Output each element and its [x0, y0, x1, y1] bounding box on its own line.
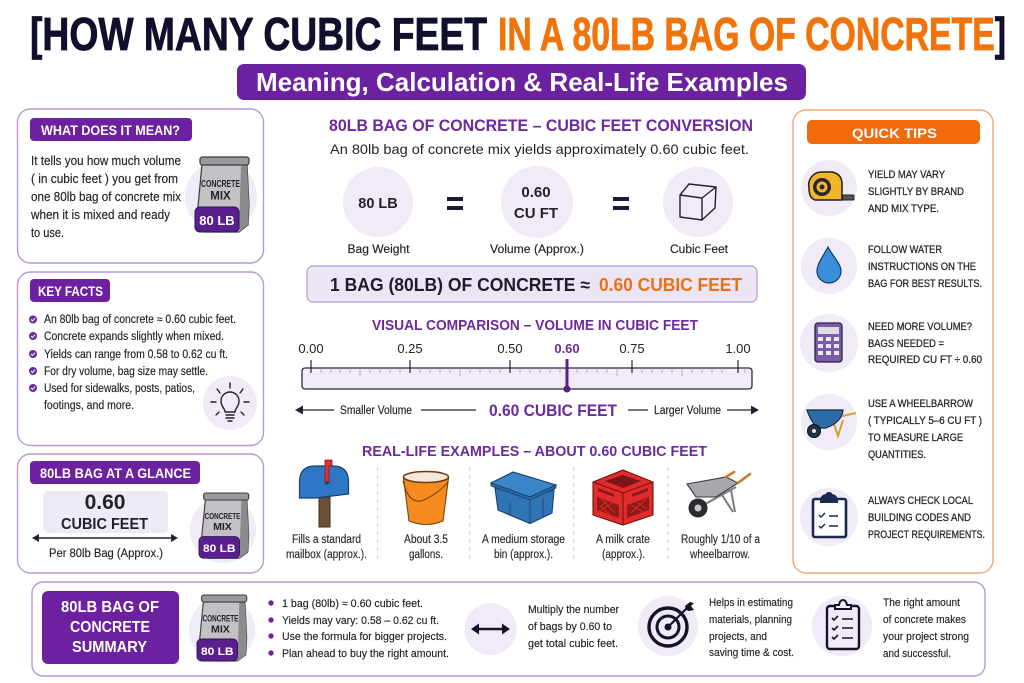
heading: what does it mean [30, 118, 192, 141]
icon: concrete bag [189, 595, 255, 663]
panel: key facts [18, 272, 264, 446]
item: bag weight [343, 167, 413, 256]
caption: storage bin: bin (approx.). [494, 549, 553, 561]
heading: key facts: KEY FACTS [38, 284, 103, 299]
arrow: smaller volume [295, 405, 476, 417]
list: key facts: Yields can range from 0.58 to 0.62 cu ft. [44, 349, 228, 361]
icon: concrete bag [190, 493, 256, 563]
section: visual comparison [295, 318, 759, 420]
text block: meaning: one 80lb bag of concrete mix [31, 190, 182, 204]
icon: wheelbarrow [687, 472, 750, 518]
heading: real-life examples: REAL-LIFE EXAMPLES – ABOUT 0.60 CUBIC FEET [362, 444, 707, 460]
item: bag weight: Bag Weight [348, 244, 410, 256]
caption: milk crate [596, 534, 650, 561]
item: bag weight: 80 LB [358, 196, 398, 212]
title [30, 8, 1006, 60]
icon: concrete bag: MIX [210, 190, 231, 202]
ruler scale: 0.25 [397, 341, 423, 356]
tip: water drop: FOLLOW WATER [868, 244, 942, 256]
caption: wheelbarrow [681, 534, 761, 561]
caption: milk crate: A milk crate [596, 534, 650, 546]
text: conversion summary: An 80lb bag of concrete mix yields approximately 0.60 cubic feet. [330, 141, 749, 157]
item: checklist [812, 596, 969, 660]
list: key facts: For dry volume, bag size may settle. [44, 366, 208, 378]
caption: mailbox: Fills a standard [292, 534, 361, 546]
icon: concrete bag: 80 LB [201, 645, 234, 658]
arrow: smaller volume: Smaller Volume [340, 405, 412, 417]
icon: bucket [403, 472, 448, 524]
title: [HOW MANY CUBIC FEET [30, 8, 487, 60]
tip: tape measure: AND MIX TYPE. [868, 203, 939, 215]
text block: meaning [30, 154, 182, 240]
tip: tape measure: YIELD MAY VARY [868, 169, 945, 181]
icon: concrete bag: MIX [211, 625, 230, 635]
item: checklist: The right amount [883, 597, 960, 609]
ruler scale: 0.75 [619, 341, 645, 356]
value: 0.60 cubic feet: CUBIC FEET [61, 516, 148, 533]
caption: per bag: Per 80lb Bag (Approx.) [49, 548, 163, 560]
heading: summary: 80LB BAG OF [61, 599, 159, 616]
heading: quick tips: QUICK TIPS [852, 125, 937, 141]
tip: clipboard: BUILDING CODES AND [868, 512, 971, 524]
item: volume [490, 166, 584, 256]
caption: bucket [404, 534, 448, 561]
tip: clipboard: ALWAYS CHECK LOCAL [868, 495, 973, 507]
heading: key facts [30, 279, 110, 302]
tip: wheelbarrow: ( TYPICALLY 5–6 CU FT ) [868, 415, 982, 427]
list: key facts: Used for sidewalks, posts, patios, [44, 383, 195, 395]
icon: concrete bag: MIX [213, 522, 232, 533]
item: cubic feet: Cubic Feet [670, 244, 729, 256]
tip: tape measure: SLIGHTLY BY BRAND [868, 186, 964, 198]
list: key facts: Concrete expands slightly when mixed. [44, 331, 224, 343]
heading: what does it mean: WHAT DOES IT MEAN? [41, 123, 180, 138]
list: key facts: An 80lb bag of concrete ≈ 0.60 cubic feet. [44, 314, 236, 326]
ruler scale: 0.50 [497, 341, 523, 356]
ruler scale [298, 341, 752, 392]
heading: at a glance: 80LB BAG AT A GLANCE [40, 466, 191, 481]
icon: concrete bag: CONCRETE [201, 179, 240, 190]
icon: concrete bag: 80 LB [203, 542, 236, 555]
equals sign [447, 197, 463, 210]
list: key facts [29, 314, 236, 412]
icon: light bulb [203, 376, 257, 430]
tip: calculator [800, 314, 982, 372]
heading: summary: CONCRETE [70, 619, 150, 636]
caption: wheelbarrow: Roughly 1/10 of a [681, 534, 761, 546]
icon: mailbox [300, 460, 348, 527]
item: target: saving time & cost. [709, 647, 794, 659]
caption: storage bin: A medium storage [482, 534, 565, 546]
arrow: larger volume [628, 405, 759, 417]
item: checklist: your project strong [883, 631, 969, 643]
tip: calculator: NEED MORE VOLUME? [868, 321, 972, 333]
item: multiply [464, 603, 619, 655]
panel: summary [32, 582, 985, 676]
tip: water drop [801, 238, 982, 294]
caption: bucket: About 3.5 [404, 534, 448, 546]
icon: concrete bag [185, 157, 257, 233]
ruler scale: 0.60 [554, 341, 580, 356]
list: summary points: Yields may vary: 0.58 – 0.62 cu ft. [282, 615, 439, 627]
icon: concrete bag: CONCRETE [203, 614, 238, 623]
item: volume: 0.60 [521, 184, 551, 201]
tip: calculator: REQUIRED CU FT ÷ 0.60 [868, 354, 982, 366]
caption: bucket: gallons. [409, 549, 443, 561]
arrow: double-headed [32, 534, 178, 542]
item: multiply: of bags by 0.60 to [528, 621, 612, 633]
ruler scale: 1.00 [725, 341, 751, 356]
heading: visual comparison: VISUAL COMPARISON – VOLUME IN CUBIC FEET [372, 318, 698, 334]
tip: wheelbarrow: USE A WHEELBARROW [868, 398, 974, 410]
list: summary points: Use the formula for bigger projects. [282, 631, 447, 643]
equals sign [613, 197, 629, 210]
tip: clipboard [800, 488, 985, 546]
text block: meaning: It tells you how much volume [31, 154, 181, 168]
callout: 1 bag equals: 1 BAG (80LB) OF CONCRETE ≈ [330, 275, 590, 295]
panel: 80lb bag at a glance [18, 454, 264, 573]
caption: mailbox: mailbox (approx.). [286, 549, 367, 561]
item: target: materials, planning [709, 614, 792, 626]
section: conversion [307, 117, 757, 302]
tip: wheelbarrow: TO MEASURE LARGE [868, 432, 963, 444]
section: real-life examples [286, 444, 761, 561]
tip: wheelbarrow [801, 394, 982, 461]
subtitle banner: Meaning, Calculation & Real-Life Examples [256, 67, 788, 97]
panel: what does it mean [18, 109, 264, 263]
ruler scale: 0.00 [298, 341, 324, 356]
caption: mailbox [286, 534, 367, 561]
tip: water drop: BAG FOR BEST RESULTS. [868, 278, 982, 290]
tip: water drop: INSTRUCTIONS ON THE [868, 261, 976, 273]
item: cubic feet [663, 167, 733, 256]
panel: quick tips [793, 110, 993, 573]
text block: meaning: when it is mixed and ready [30, 208, 171, 222]
item: volume: CU FT [514, 205, 558, 222]
heading: quick tips [807, 120, 980, 144]
item: checklist: of concrete makes [883, 614, 966, 626]
arrow: larger volume: Larger Volume [654, 405, 721, 417]
heading: at a glance [30, 461, 200, 484]
list: summary points: Plan ahead to buy the right amount. [282, 648, 449, 660]
list: summary points [268, 598, 449, 660]
icon: concrete bag: 80 LB [199, 213, 235, 228]
heading: conversion: 80LB BAG OF CONCRETE – CUBIC FEET CONVERSION [329, 117, 753, 135]
icon: storage bin [491, 472, 556, 524]
text block: meaning: ( in cubic feet ) you get from [31, 172, 178, 186]
tip: tape measure [801, 160, 964, 216]
list: summary points: 1 bag (80lb) ≈ 0.60 cubic feet. [282, 598, 423, 610]
callout: 1 bag equals: 0.60 CUBIC FEET [599, 275, 742, 295]
value: 0.60 cubic feet: 0.60 [85, 491, 125, 514]
item: target: Helps in estimating [709, 597, 793, 609]
list: key facts: footings, and more. [44, 400, 134, 412]
item: multiply: get total cubic feet. [528, 638, 618, 650]
heading: summary [42, 591, 179, 664]
tip: wheelbarrow: QUANTITIES. [868, 449, 926, 461]
text block: meaning: to use. [31, 226, 64, 240]
heading: summary: SUMMARY [72, 639, 147, 656]
caption: storage bin [482, 534, 565, 561]
item: volume: Volume (Approx.) [490, 244, 584, 256]
value: 0.60 cubic feet [43, 491, 168, 533]
item: target: projects, and [709, 631, 767, 643]
caption: milk crate: (approx.). [602, 549, 645, 561]
icon: concrete bag: CONCRETE [205, 511, 240, 521]
caption: wheelbarrow: wheelbarrow. [689, 549, 750, 561]
tip: calculator: BAGS NEEDED = [868, 338, 944, 350]
callout: 1 bag equals [307, 266, 757, 302]
tip: clipboard: PROJECT REQUIREMENTS. [868, 529, 985, 541]
marker: 0.60 [564, 359, 570, 392]
value: 0.60 cubic feet: 0.60 CUBIC FEET [489, 401, 618, 420]
item: target [638, 596, 794, 659]
item: multiply: Multiply the number [528, 604, 619, 616]
icon: milk crate [593, 470, 653, 525]
item: checklist: and successful. [883, 648, 951, 660]
